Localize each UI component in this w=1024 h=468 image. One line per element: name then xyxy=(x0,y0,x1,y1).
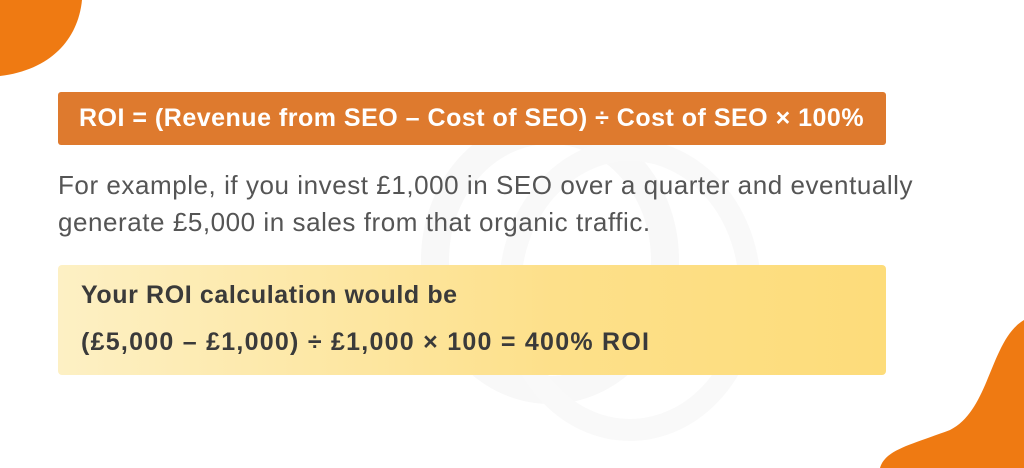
calculation line 1: Your ROI calculation would be xyxy=(81,281,458,309)
example paragraph: For example, if you invest £1,000 in SEO over a quarter and eventually xyxy=(58,170,913,200)
example paragraph xyxy=(58,170,913,237)
example paragraph: generate £5,000 in sales from that organic traffic. xyxy=(58,207,651,237)
watermark circle xyxy=(220,100,820,460)
formula banner xyxy=(58,92,886,145)
decorative blob: bottom-right xyxy=(880,320,1024,468)
calculation box xyxy=(58,265,886,375)
calculation line 2: (£5,000 – £1,000) ÷ £1,000 × 100 = 400% ROI xyxy=(81,328,650,356)
decorative blob: top-left xyxy=(0,0,82,76)
formula banner: ROI = (Revenue from SEO – Cost of SEO) ÷ Cost of SEO × 100% xyxy=(79,104,864,132)
